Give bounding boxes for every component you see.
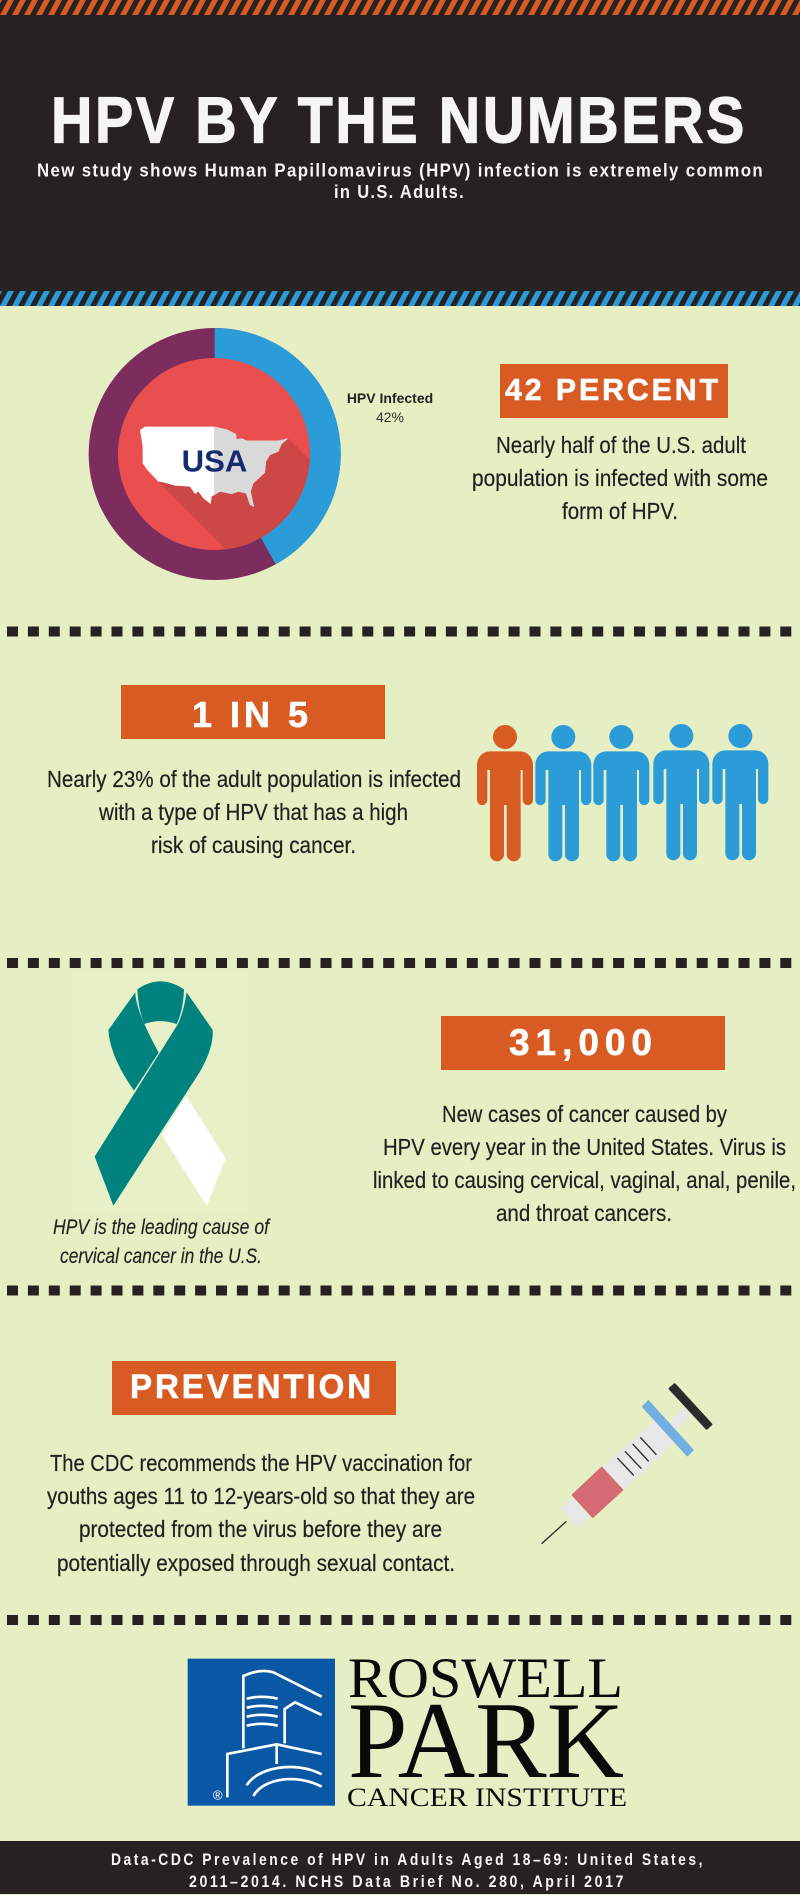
donut chart with USA map [89,328,341,580]
body text: potentially exposed through sexual contact. [57,1550,455,1576]
panel: 42 percent [89,328,768,580]
ribbon caption [53,1216,271,1268]
body text: Nearly 23% of the adult population is infected [47,766,461,792]
panel: 1 in 5 [47,685,768,861]
body text: youths ages 11 to 12-years-old so that they are [47,1483,475,1509]
icon: syringe [542,1385,711,1543]
icon: five people [477,724,768,861]
heading box [121,685,385,739]
body text: with a type of HPV that has a high [98,799,408,825]
chart label: HPV Infected [347,390,433,406]
chart label [347,390,433,425]
heading box [112,1361,396,1415]
body text [47,1450,475,1576]
panel: footer source [0,1841,800,1894]
panel: header [0,0,800,306]
body text: New cases of cancer caused by [442,1101,727,1127]
body text: and throat cancers. [496,1200,672,1226]
panel: 31,000 [53,973,796,1268]
heading box [441,1016,725,1070]
subtitle [37,160,764,202]
body text: Nearly half of the U.S. adult [496,432,747,458]
chart label: 42% [376,409,404,425]
panel: footer source: Data-CDC Prevalence of HPV in Adults Aged 18–69: United States, [111,1851,705,1869]
logo mark [188,1659,335,1806]
body text: risk of causing cancer. [151,832,356,858]
subtitle: in U.S. Adults. [334,181,465,202]
logo wordmark: ROSWELL [348,1647,623,1710]
donut chart with USA map: USA [182,445,247,479]
heading box: PREVENTION [130,1368,374,1406]
logo wordmark: PARK [348,1680,624,1801]
body text: protected from the virus before they are [79,1516,442,1542]
heading box: 1 IN 5 [192,694,308,735]
logo wordmark: CANCER INSTITUTE [347,1783,627,1812]
heading box: 31,000 [509,1022,652,1063]
panel: logo [188,1647,627,1812]
logo mark: ® [213,1787,223,1802]
body text [472,432,768,524]
body text [47,766,461,858]
ribbon caption: HPV is the leading cause of [53,1216,271,1239]
panel: prevention [47,1361,711,1576]
body text: population is infected with some [472,465,768,491]
body text: The CDC recommends the HPV vaccination for [50,1450,472,1476]
body text: form of HPV. [562,498,678,524]
ribbon caption: cervical cancer in the U.S. [60,1245,262,1268]
body text [373,1101,796,1226]
panel: footer source: 2011–2014. NCHS Data Brief No. 280, April 2017 [189,1873,626,1891]
heading box [500,364,728,418]
icon: ribbon [73,973,247,1213]
heading box: 42 PERCENT [505,372,721,407]
